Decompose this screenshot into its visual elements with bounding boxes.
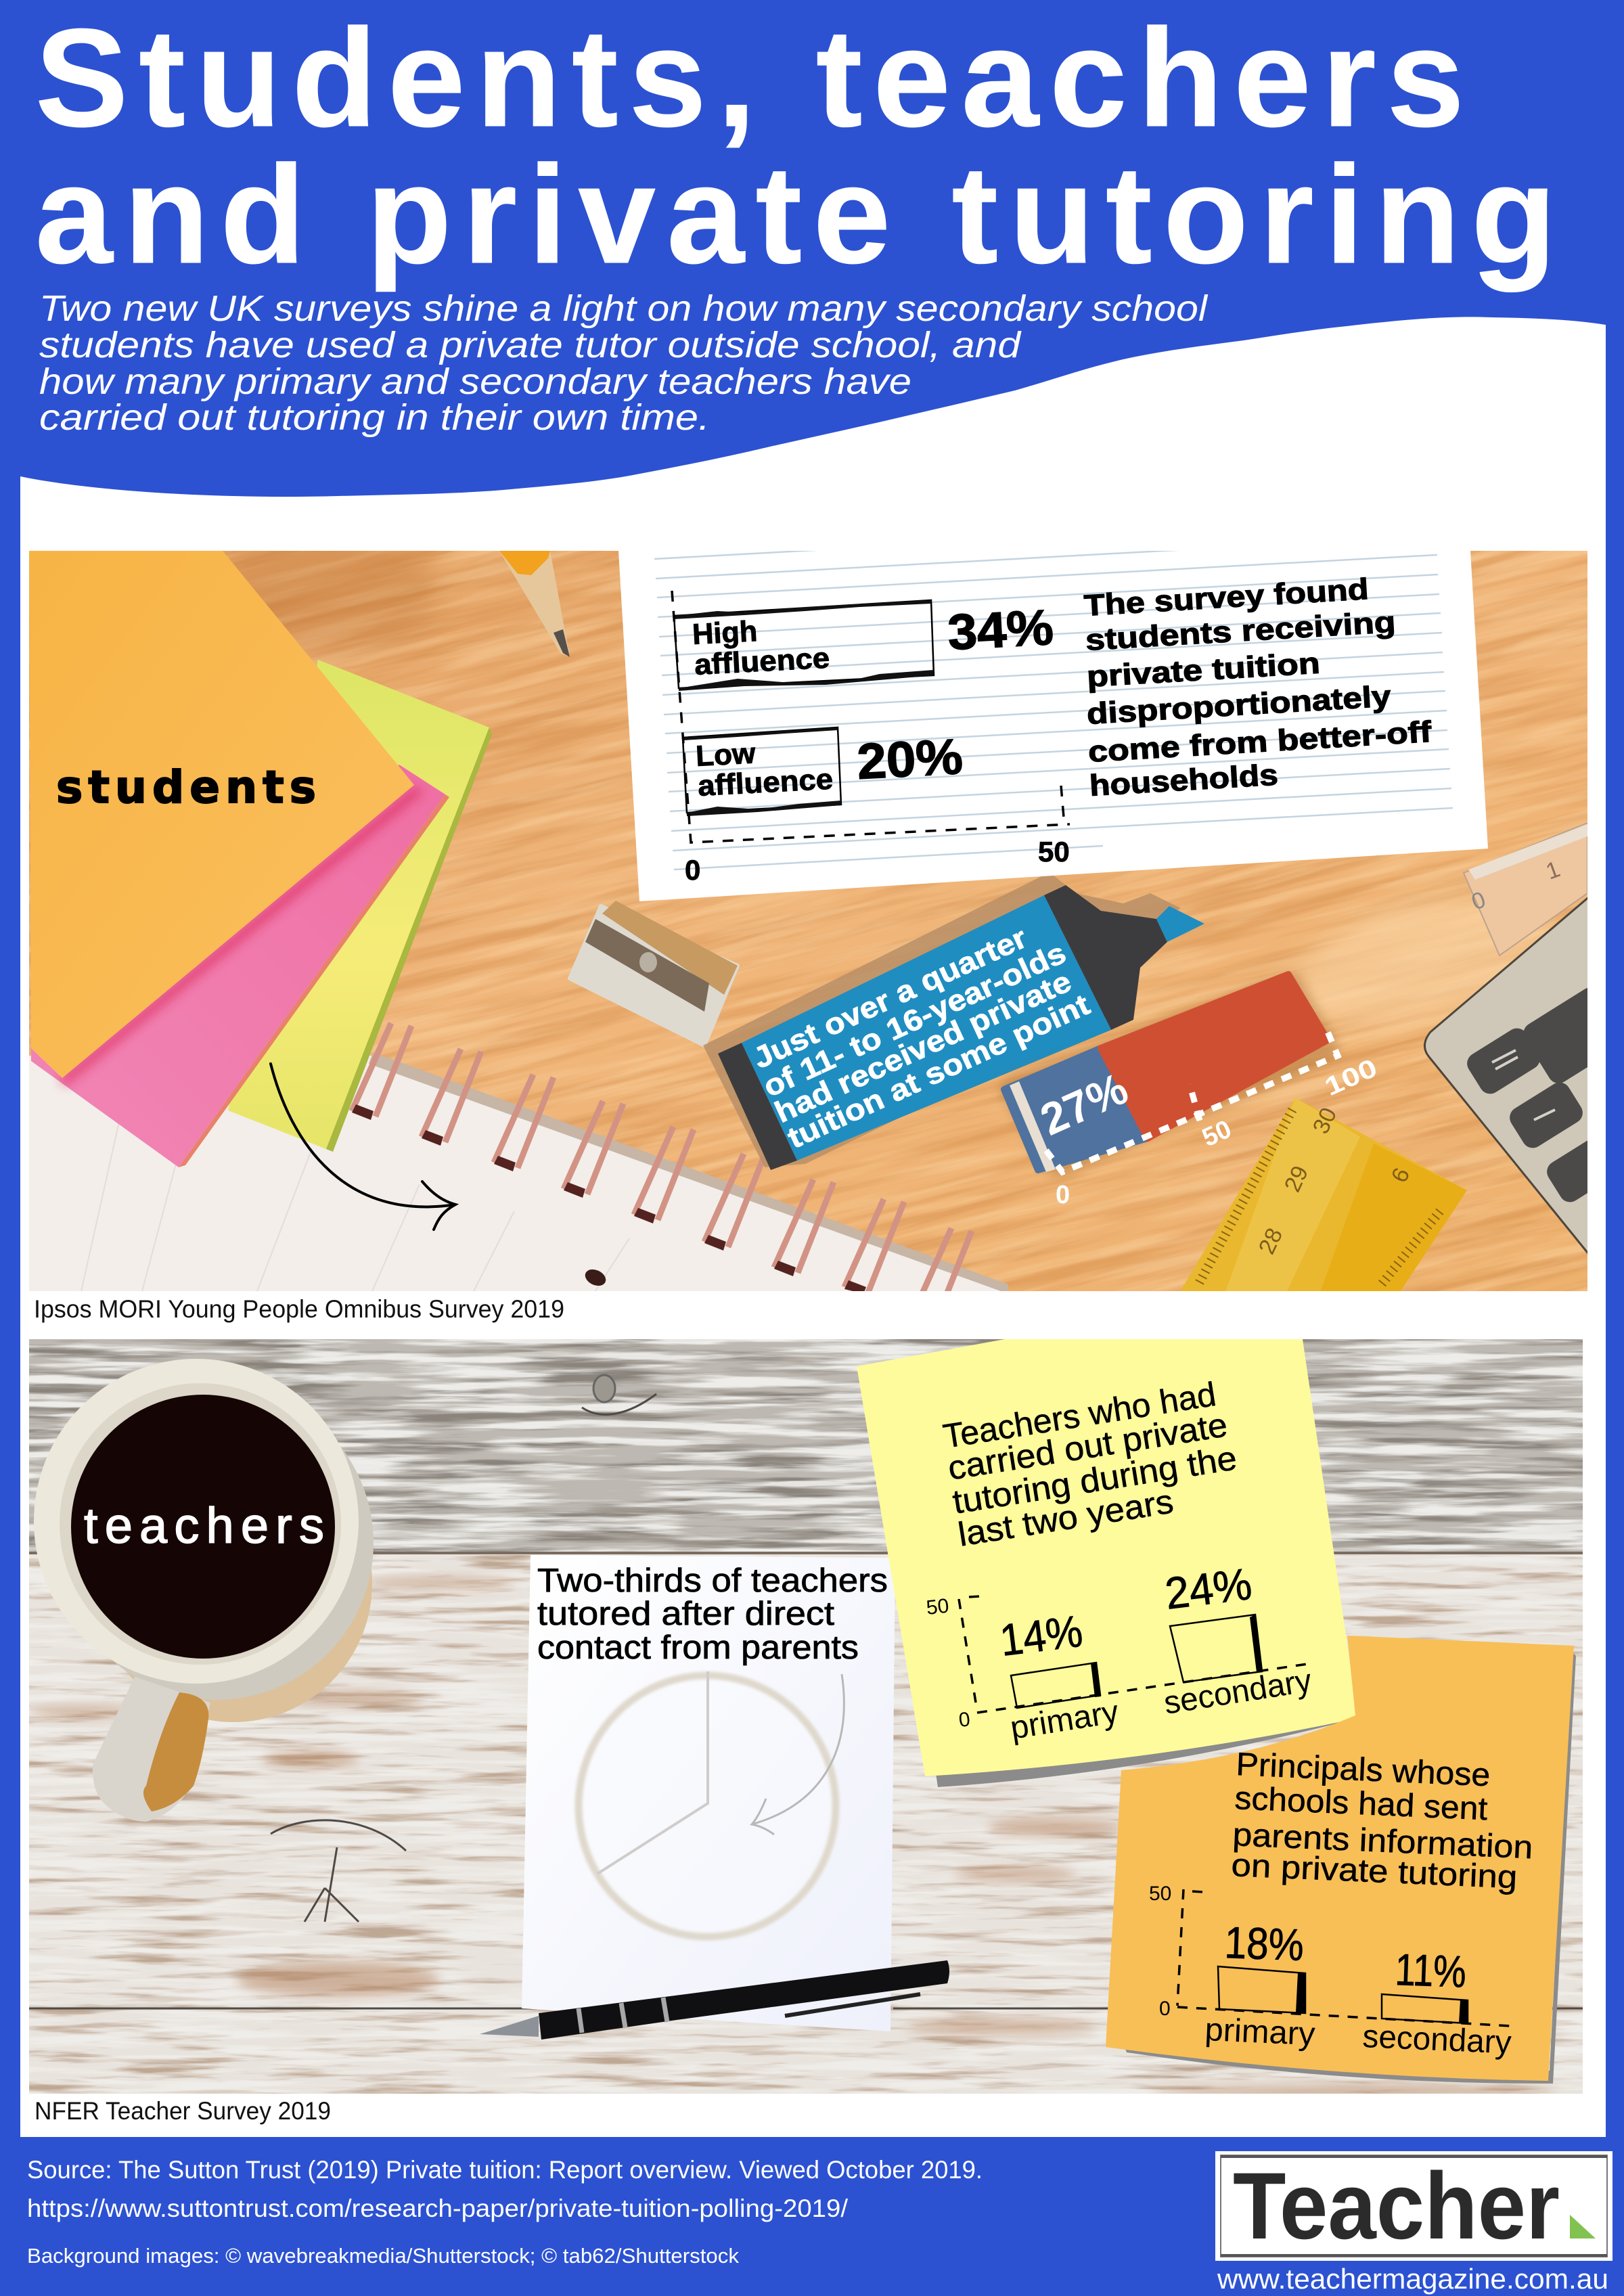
note heading: tutoring during the (950, 1439, 1240, 1521)
mug rim (34, 1359, 359, 1684)
caption: teachers source: NFER Teacher Survey 2019 (35, 2097, 331, 2125)
highlighter shadow (703, 872, 1181, 1167)
low affluence bar (683, 727, 841, 816)
bar chart: teachers tutoring: 50 (925, 1595, 950, 1619)
bar chart: teachers tutoring: 0 (957, 1708, 971, 1732)
eraser value: 27% (1033, 1062, 1135, 1145)
pen (480, 1960, 949, 2040)
text: two-thirds: tutored after direct (537, 1596, 834, 1632)
high affluence bar: affluence (694, 642, 830, 681)
title (35, 0, 1556, 292)
note heading: last two years (955, 1482, 1176, 1554)
label: students: students (56, 761, 316, 813)
bar chart: principals: 50 (1149, 1883, 1171, 1905)
notebook hole mark (583, 1266, 608, 1289)
survey finding text: The survey found (1083, 572, 1370, 623)
bar: secondary (1382, 1994, 1468, 2024)
note heading: parents information (1232, 1817, 1533, 1866)
high affluence value: 34% (946, 599, 1055, 660)
subtitle: carried out tutoring in their own time. (39, 397, 710, 438)
clear ruler top right: 1 (1543, 856, 1564, 885)
yellow ruler: 30 (1308, 1104, 1342, 1138)
label: teachers: teachers (84, 1498, 324, 1554)
sticky note: orange principals (1106, 1636, 1576, 2084)
note heading: on private tutoring (1231, 1847, 1518, 1895)
bar chart: teachers tutoring (925, 1558, 1314, 1747)
high affluence bar (674, 600, 934, 691)
axis labels (685, 836, 1070, 886)
highlighter text: had received private (770, 965, 1077, 1129)
bar chart: teachers tutoring: secondary (1161, 1663, 1314, 1721)
axis labels: 0 (685, 854, 700, 886)
eraser axis labels: 50 (1198, 1115, 1236, 1152)
survey finding text (1083, 572, 1433, 803)
pencil (499, 551, 570, 657)
highlighter text: of 11- to 16-year-olds (759, 936, 1071, 1104)
bar chart: principals: 18% (1224, 1917, 1305, 1970)
subtitle (39, 288, 1209, 438)
calculator (1424, 897, 1587, 1255)
coffee (71, 1395, 335, 1659)
note heading (1231, 1747, 1533, 1895)
mug side (60, 1386, 374, 1700)
footer source text: Source: The Sutton Trust (2019) Private tuition: Report overview. Viewed October 2019. (27, 2156, 983, 2184)
panel: students (29, 551, 1587, 1291)
note shadow (1123, 1651, 1576, 2084)
text: two-thirds: contact from parents (537, 1629, 859, 1666)
caption: students source: Ipsos MORI Young People Omnibus Survey 2019 (34, 1295, 564, 1323)
yellow ruler: 28 (1254, 1224, 1288, 1258)
eraser axis labels: 0 (1056, 1181, 1070, 1209)
highlighter body (742, 895, 1111, 1161)
footer source text (27, 2156, 983, 2268)
highlighter text: Just over a quarter (748, 921, 1032, 1075)
panel: teachers (27, 1339, 1583, 2098)
sticky note: orange (29, 551, 414, 1078)
text: two-thirds (537, 1562, 888, 1666)
sticky note: pink (31, 765, 449, 1167)
survey finding text: households (1089, 759, 1279, 803)
yellow ruler (1179, 1098, 1467, 1294)
low affluence value: 20% (855, 728, 964, 790)
clear ruler top right: 0 (1468, 886, 1489, 916)
bar: primary (1011, 1663, 1101, 1708)
low affluence bar: Low (695, 737, 757, 773)
wood knots (271, 1375, 656, 1922)
yellow ruler: 6 (1386, 1164, 1415, 1186)
highlighter text: tuition at some point (783, 988, 1095, 1155)
bar chart: principals (1149, 1883, 1512, 2061)
paper: affluence chart (618, 516, 1488, 901)
white content panel with wave top (20, 317, 1606, 2137)
grey arrow (752, 1674, 844, 1834)
notebook spiral rings (352, 1023, 972, 1322)
note shadow (934, 1712, 1358, 1787)
pie dividers (597, 1671, 708, 1874)
eraser axis labels: 100 (1321, 1054, 1382, 1102)
bar chart: principals: primary (1204, 2012, 1316, 2052)
highlighter (703, 872, 1204, 1170)
footer source text: Background images: © wavebreakmedia/Shutterstock; © tab62/Shutterstock (27, 2244, 739, 2268)
ruled lines (654, 516, 1453, 870)
bar chart: principals: 11% (1395, 1944, 1467, 1997)
survey finding text: students receiving (1085, 606, 1397, 657)
coffee mug (34, 1359, 374, 1822)
highlighter tip (1156, 906, 1204, 942)
bar: secondary (1170, 1615, 1263, 1682)
paper with coffee ring pie (522, 1555, 895, 2031)
title: and private tutoring (35, 137, 1556, 292)
subtitle: students have used a private tutor outside school, and (39, 325, 1022, 365)
pencil sharpener (570, 901, 738, 1045)
eraser axis (1046, 1029, 1338, 1172)
eraser 27% chart (1000, 973, 1382, 1209)
curved arrow to notebook (271, 1064, 455, 1230)
logo: Teacher: Teacher (1233, 2153, 1560, 2259)
survey finding text: disproportionately (1086, 679, 1392, 731)
chart axes (672, 591, 1070, 842)
note heading (941, 1375, 1240, 1554)
eraser axis labels (1056, 1054, 1382, 1209)
weathered wood background (27, 1339, 1583, 2098)
bar chart: principals: 0 (1159, 1998, 1171, 2020)
bar: primary (1218, 1966, 1305, 2013)
bar chart: teachers tutoring: 24% (1163, 1558, 1255, 1619)
wood desk background (29, 551, 1587, 1291)
bar chart: teachers tutoring: 14% (997, 1606, 1085, 1665)
mug body shadow (95, 1445, 372, 1722)
note sheet (857, 1339, 1358, 1776)
footer source text: https://www.suttontrust.com/research-paper/private-tuition-polling-2019/ (27, 2194, 849, 2222)
note heading: Teachers who had (941, 1375, 1219, 1456)
bar chart: teachers tutoring: primary (1008, 1694, 1121, 1747)
survey finding text: private tuition (1086, 647, 1321, 694)
highlighter cap (1044, 885, 1167, 1030)
sticky note: yellow (857, 1339, 1358, 1787)
text: two-thirds: Two-thirds of teachers (537, 1562, 888, 1599)
note heading: Principals whose (1236, 1747, 1491, 1793)
axis labels: 50 (1038, 836, 1070, 868)
mug handle (93, 1677, 210, 1822)
highlighter end (718, 1043, 797, 1170)
clear ruler top right (1464, 823, 1587, 955)
subtitle: Two new UK surveys shine a light on how many secondary school (39, 288, 1209, 329)
high affluence bar: High (692, 615, 758, 651)
note sheet (1106, 1636, 1574, 2081)
low affluence bar: affluence (697, 763, 834, 803)
website: www.teachermagazine.com.au (1217, 2263, 1608, 2295)
survey finding text: come from better-off (1087, 715, 1433, 769)
highlighter text (748, 921, 1095, 1155)
title: Students, teachers (35, 0, 1464, 156)
yellow ruler: 29 (1280, 1162, 1313, 1196)
coffee ring (579, 1675, 836, 1937)
subtitle: how many primary and secondary teachers have (39, 361, 911, 402)
bar chart: principals: secondary (1362, 2019, 1512, 2061)
note heading: carried out private (945, 1405, 1230, 1487)
notebook (29, 1023, 1008, 1322)
note heading: schools had sent (1234, 1780, 1488, 1827)
sticky note: lime (228, 660, 492, 1152)
